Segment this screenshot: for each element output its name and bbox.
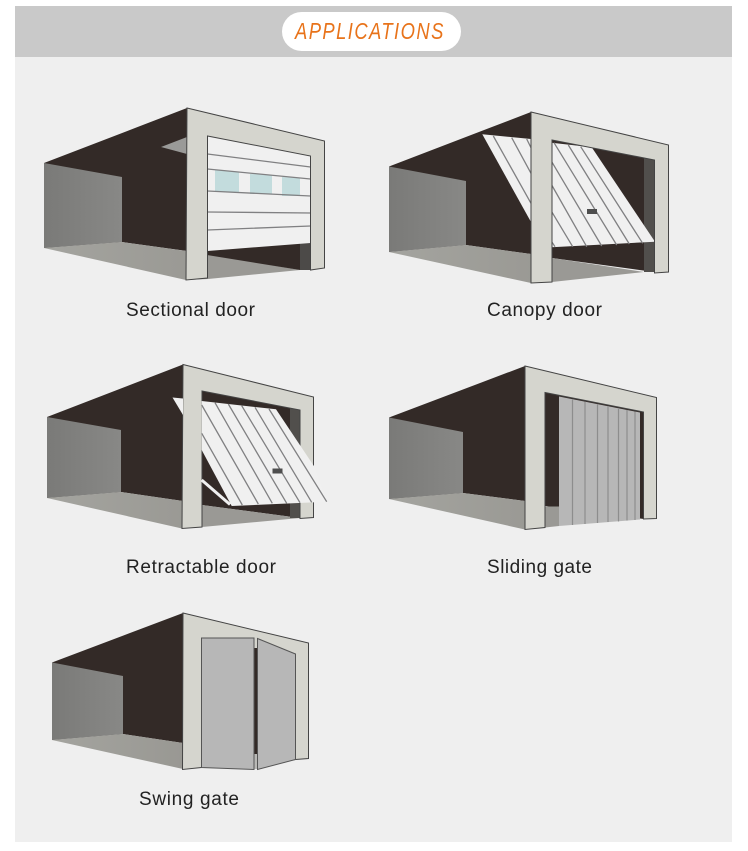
header band	[15, 6, 732, 57]
door leaf left of frame	[482, 134, 531, 222]
title pill: APPLICATIONS	[293, 19, 445, 45]
right leaf	[258, 638, 296, 770]
left leaf	[202, 638, 254, 770]
door leaf	[172, 398, 327, 506]
sliding gate illustration	[389, 366, 656, 530]
label: retractable door: Retractable door	[126, 557, 277, 578]
title pill	[282, 12, 461, 51]
door leaf inside frame	[552, 143, 655, 247]
handle	[587, 209, 597, 214]
support arm	[202, 480, 230, 504]
label: swing gate: Swing gate	[139, 789, 239, 810]
retractable door illustration	[47, 364, 327, 528]
label: sectional door: Sectional door	[126, 300, 256, 321]
canopy door illustration	[389, 112, 668, 283]
door panels	[208, 136, 310, 251]
sliding panels	[559, 396, 640, 526]
sectional door illustration	[44, 108, 324, 280]
label: sliding gate: Sliding gate	[487, 557, 592, 578]
handle	[272, 468, 282, 474]
swing gate illustration	[52, 613, 308, 770]
label: canopy door: Canopy door	[487, 300, 603, 321]
